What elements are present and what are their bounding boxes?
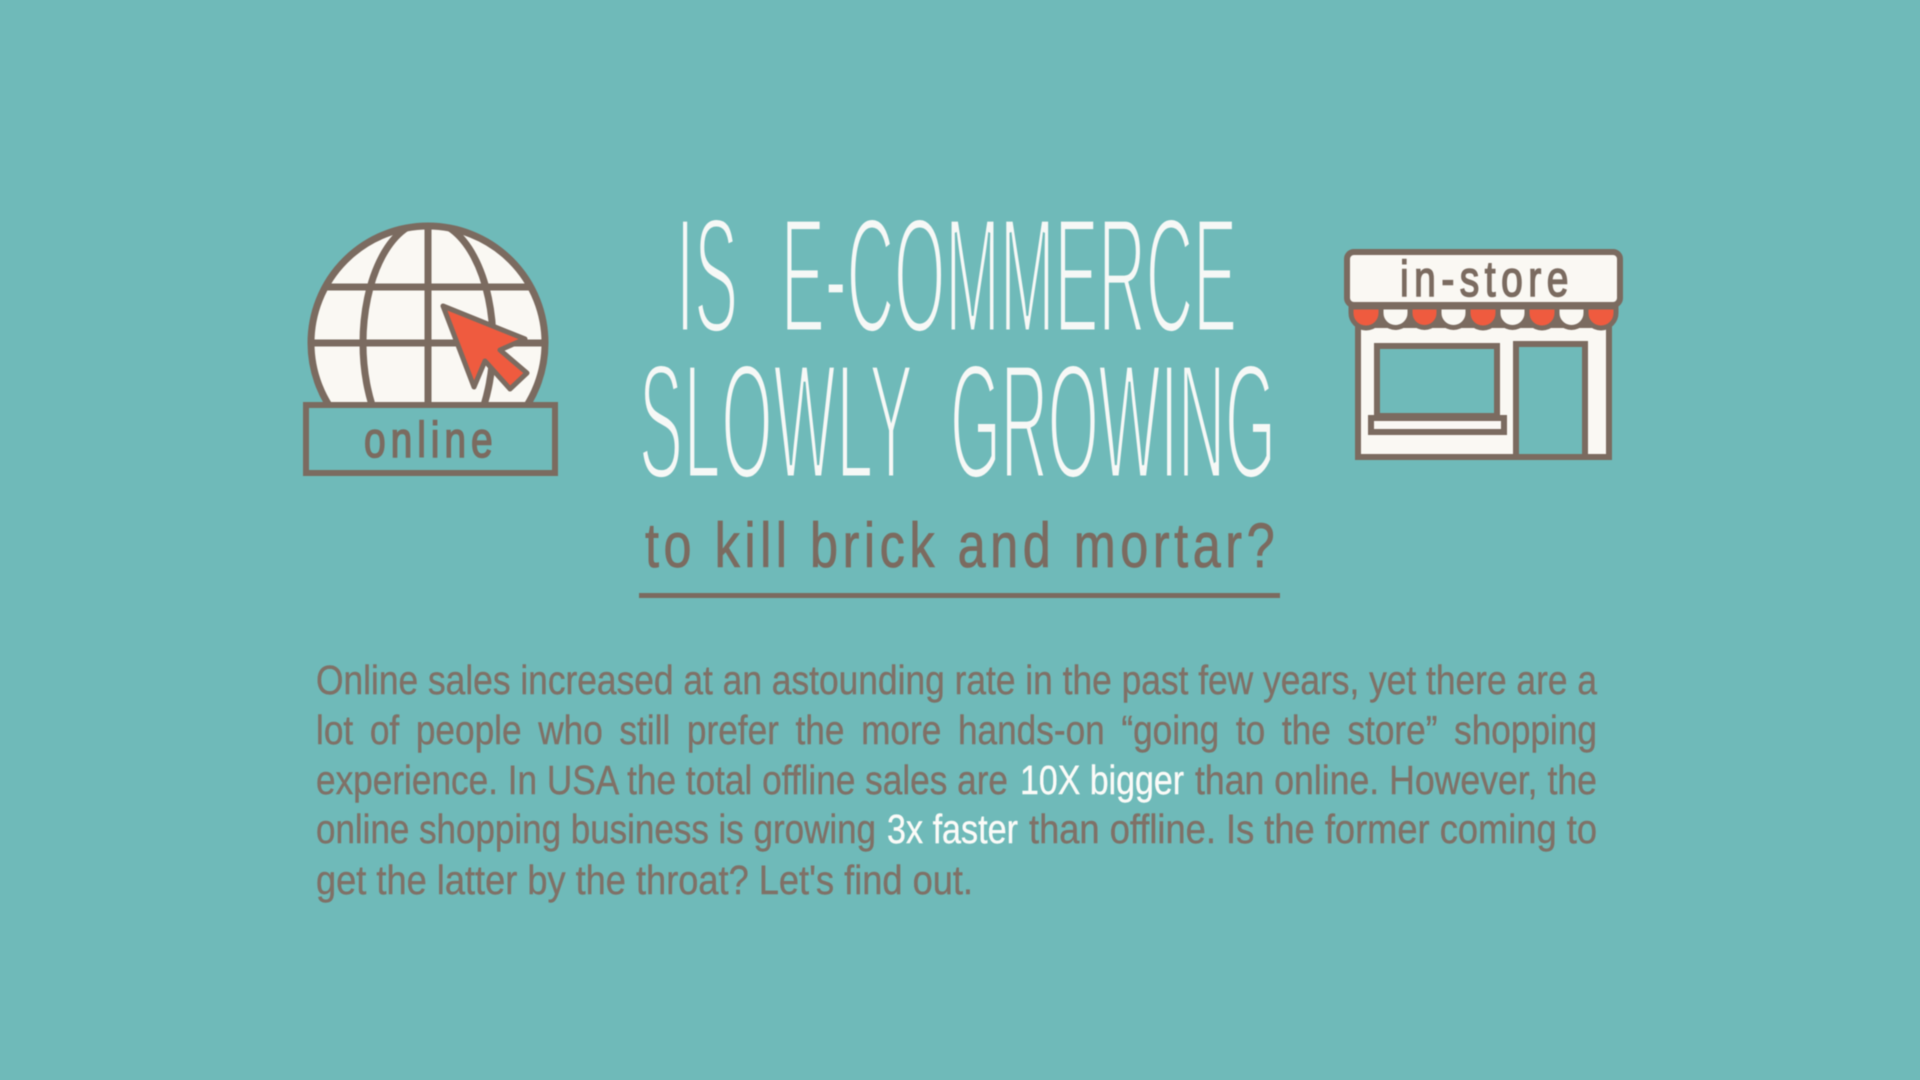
title line 1: IS — [676, 185, 738, 367]
paragraph line 4 — [316, 806, 1597, 852]
title line 2: SLOWLY — [639, 331, 913, 513]
title line 2 — [639, 331, 1276, 513]
title line 1: E-COMMERCE — [781, 185, 1237, 367]
title line 2: GROWING — [950, 331, 1276, 513]
online label text: online — [364, 411, 493, 468]
window sill — [1371, 418, 1504, 432]
icon: in-store shop front — [1347, 250, 1620, 457]
awning scallops — [1351, 307, 1616, 328]
cursor arrow — [443, 306, 527, 389]
window — [1377, 346, 1497, 416]
paragraph line 4: than offline. Is the former coming to — [1029, 806, 1597, 852]
subtitle: to kill brick and mortar? — [645, 511, 1275, 581]
paragraph line 4: online shopping business is growing — [316, 806, 876, 852]
globe — [307, 222, 549, 403]
paragraph line 3 — [316, 757, 1597, 803]
highlight: 3x faster: 3x faster — [887, 806, 1018, 852]
paragraph line 5: get the latter by the throat? Let's find out. — [316, 857, 973, 903]
paragraph line 3: than online. However, the — [1195, 757, 1597, 803]
infographic canvas — [302, 219, 1624, 904]
paragraph line 1: Online sales increased at an astounding rate in the past few years, yet there are a — [316, 657, 1597, 703]
paragraph line 2: lot of people who still prefer the more hands-on “going to the store” shopping — [316, 707, 1597, 753]
in-store label: in-store — [1400, 250, 1568, 307]
door — [1516, 344, 1585, 457]
body paragraph — [316, 657, 1597, 903]
sign board — [1347, 252, 1620, 305]
online label box — [306, 405, 555, 473]
title — [639, 185, 1276, 513]
icon: online globe with cursor — [300, 220, 560, 473]
paragraph line 3: experience. In USA the total offline sales are — [316, 757, 1008, 803]
subtitle underline — [639, 593, 1280, 598]
highlight: 10X bigger: 10X bigger — [1020, 757, 1184, 803]
building — [1358, 325, 1609, 457]
